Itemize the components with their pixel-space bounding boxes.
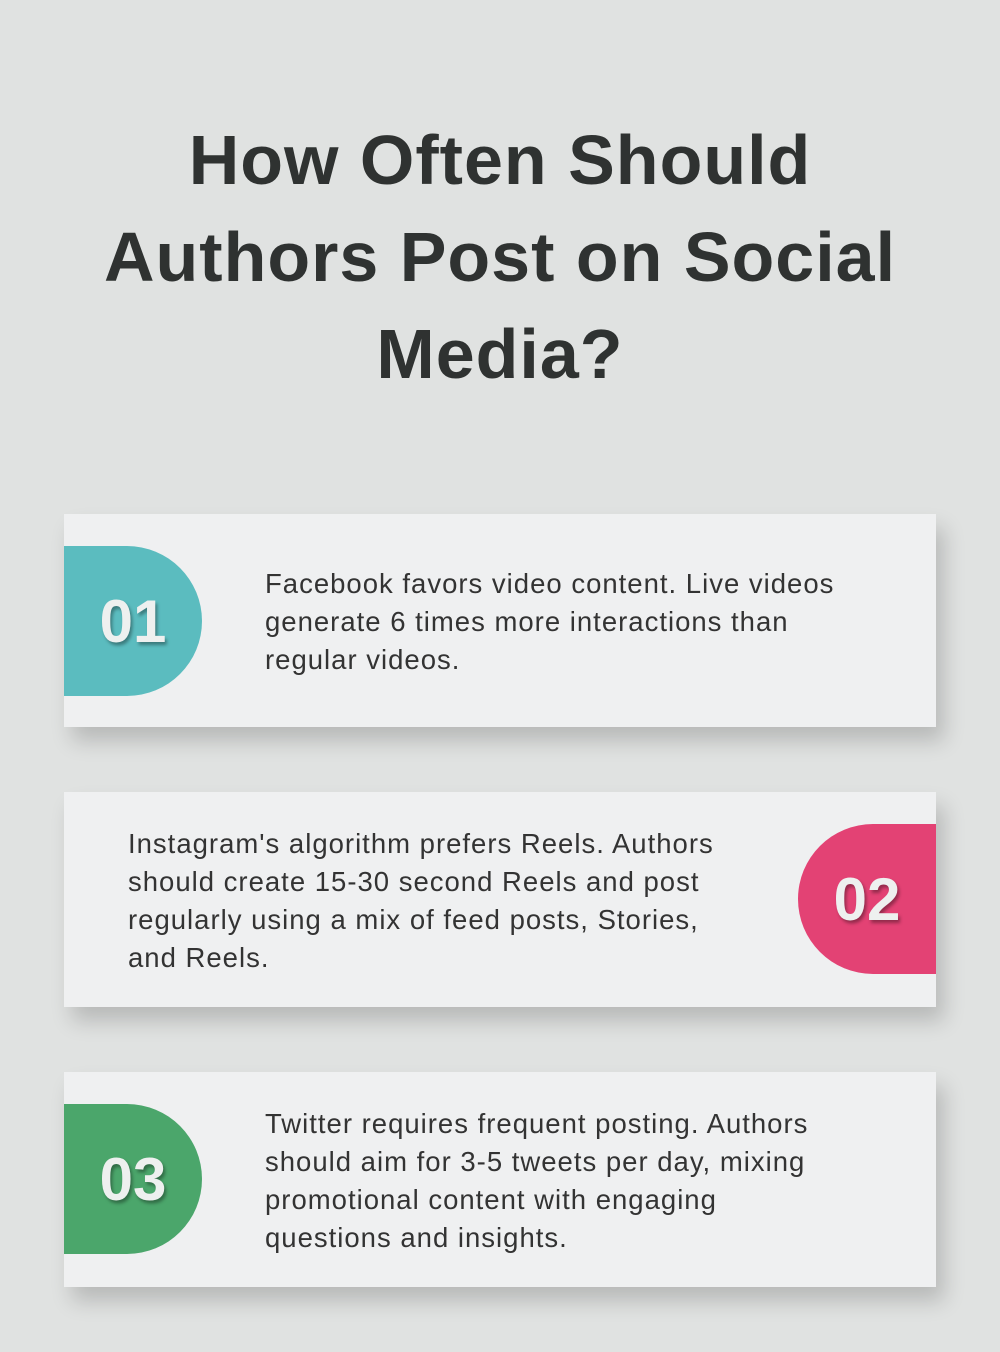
badge 01	[64, 546, 202, 696]
text 02: should create 15-30 second Reels and post	[128, 866, 700, 897]
text 03: questions and insights.	[265, 1222, 568, 1253]
panel: 02 instagram	[64, 792, 936, 1007]
title	[104, 121, 896, 393]
text 01: regular videos.	[265, 644, 460, 675]
text 03: should aim for 3-5 tweets per day, mixing	[265, 1146, 805, 1177]
badge 02: 02	[834, 866, 900, 932]
title: How Often Should	[189, 121, 811, 199]
text 02: Instagram's algorithm prefers Reels. Authors	[128, 828, 714, 859]
badge 03: 03	[100, 1146, 166, 1212]
text 03	[265, 1108, 808, 1253]
text 02: regularly using a mix of feed posts, Stories,	[128, 904, 699, 935]
title: Media?	[376, 315, 624, 393]
panel: 01 facebook	[64, 514, 936, 727]
text 01: generate 6 times more interactions than	[265, 606, 789, 637]
text 03: promotional content with engaging	[265, 1184, 717, 1215]
text 01	[265, 568, 834, 675]
text 02: and Reels.	[128, 942, 269, 973]
title: Authors Post on Social	[104, 218, 896, 296]
text 02	[128, 828, 714, 973]
panel: 03 twitter	[64, 1072, 936, 1287]
text 03: Twitter requires frequent posting. Authors	[265, 1108, 808, 1139]
text 01: Facebook favors video content. Live videos	[265, 568, 834, 599]
badge 01: 01	[100, 588, 166, 654]
badge 03	[64, 1104, 202, 1254]
badge 02	[798, 824, 936, 974]
